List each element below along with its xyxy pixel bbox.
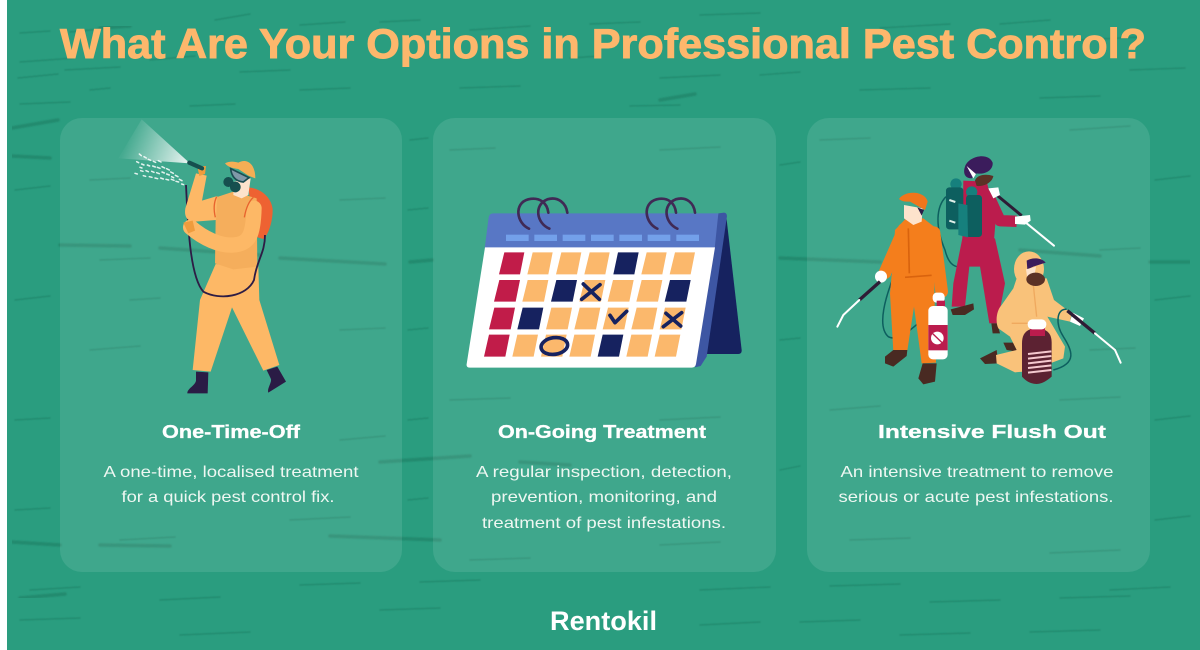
neck and face	[233, 178, 251, 198]
nozzle	[189, 163, 202, 168]
gloves	[197, 166, 206, 176]
orange worker	[837, 193, 948, 384]
text block	[838, 464, 1114, 506]
header tabs	[506, 235, 699, 241]
icon: three workers	[837, 156, 1121, 384]
cells row 4	[484, 335, 680, 357]
heading: One-Time-Off	[162, 421, 301, 442]
lower arm	[191, 208, 254, 245]
legs	[193, 264, 279, 372]
heading: On-Going Treatment	[498, 421, 706, 442]
yellow worker	[980, 251, 1121, 384]
calendar marks	[540, 284, 682, 356]
title: What Are Your Options in Professional Pest Control?	[60, 20, 1146, 67]
text block: An intensive treatment to remove	[840, 464, 1114, 481]
hose	[186, 185, 265, 296]
text block: prevention, monitoring, and	[491, 489, 717, 506]
backpack	[248, 187, 273, 239]
spray bottle	[933, 293, 945, 303]
text block	[104, 464, 359, 506]
gas mask	[231, 169, 249, 182]
panel: intensive flush out	[807, 118, 1150, 572]
text block: A one-time, localised treatment	[104, 464, 359, 481]
calendar back	[703, 214, 742, 354]
calendar header	[485, 213, 718, 248]
strap	[214, 197, 253, 217]
text block: for a quick pest control fix.	[122, 489, 334, 506]
boots	[187, 367, 286, 393]
icon: calendar	[467, 199, 742, 368]
cap	[225, 161, 255, 178]
cells row 1	[499, 252, 695, 274]
text block: treatment of pest infestations.	[482, 515, 726, 532]
cells row 3	[489, 308, 686, 329]
raised arm	[185, 173, 217, 222]
cells row 2	[494, 280, 691, 302]
binder rings	[518, 199, 695, 229]
heading: Intensive Flush Out	[878, 421, 1106, 442]
icon: worker spraying	[118, 119, 286, 393]
round tank	[1022, 329, 1052, 384]
text block: A regular inspection, detection,	[476, 464, 732, 481]
calendar side	[695, 213, 727, 367]
spray cone	[118, 119, 190, 163]
spray droplets	[135, 154, 184, 185]
text block: serious or acute pest infestations.	[838, 489, 1114, 506]
red worker	[938, 156, 1054, 333]
panel: on-going treatment	[433, 118, 776, 572]
calendar page	[467, 247, 715, 368]
panel: one-time-off	[60, 118, 402, 572]
torso	[215, 192, 257, 269]
logo: Rentokil: Rentokil	[550, 606, 657, 636]
text block	[476, 464, 732, 532]
